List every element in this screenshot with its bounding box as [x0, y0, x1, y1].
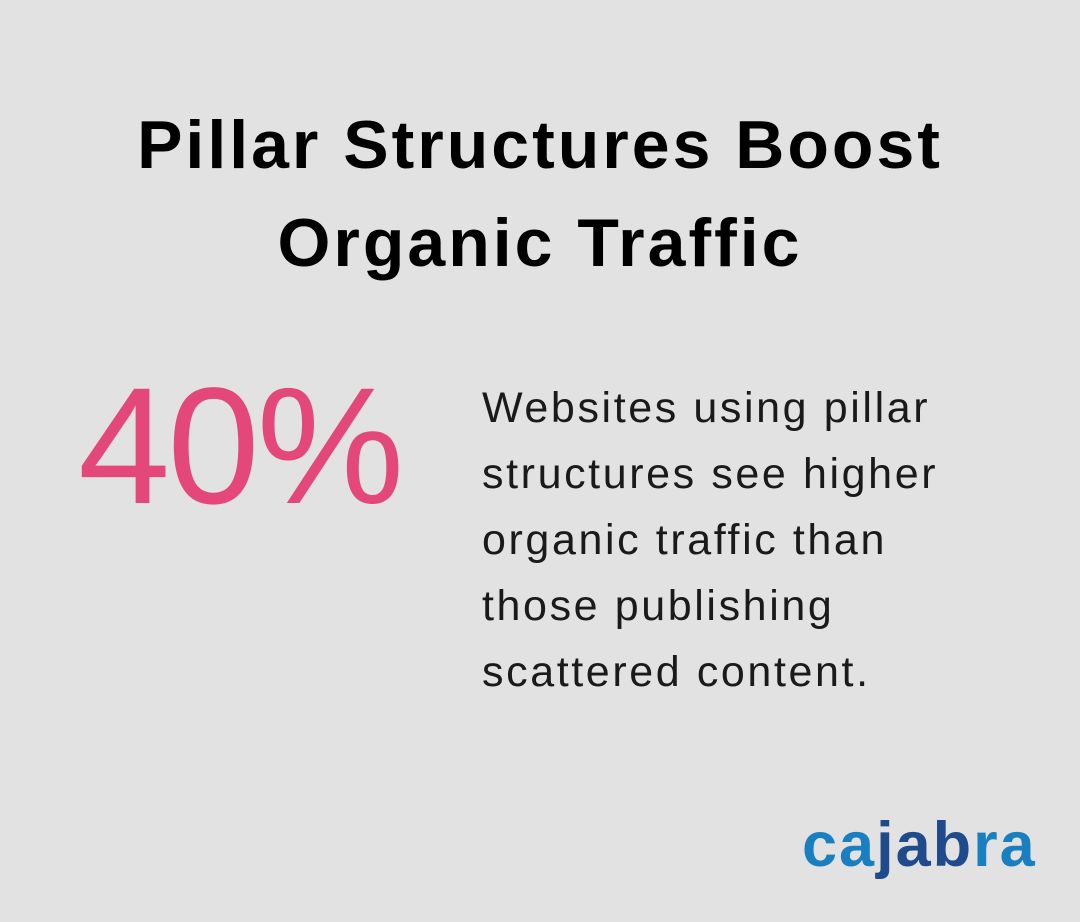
- description text: structures see higher: [482, 450, 938, 498]
- description text: [482, 384, 938, 696]
- description text: scattered content.: [482, 648, 871, 696]
- title: Pillar Structures Boost: [137, 107, 943, 183]
- title: [137, 107, 943, 281]
- description text: Websites using pillar: [482, 384, 930, 432]
- description text: those publishing: [482, 582, 834, 630]
- logo: cajabra: cajabra: [802, 810, 1037, 880]
- statistic: 40%: 40%: [78, 354, 401, 539]
- title: Organic Traffic: [278, 205, 802, 281]
- description text: organic traffic than: [482, 516, 887, 564]
